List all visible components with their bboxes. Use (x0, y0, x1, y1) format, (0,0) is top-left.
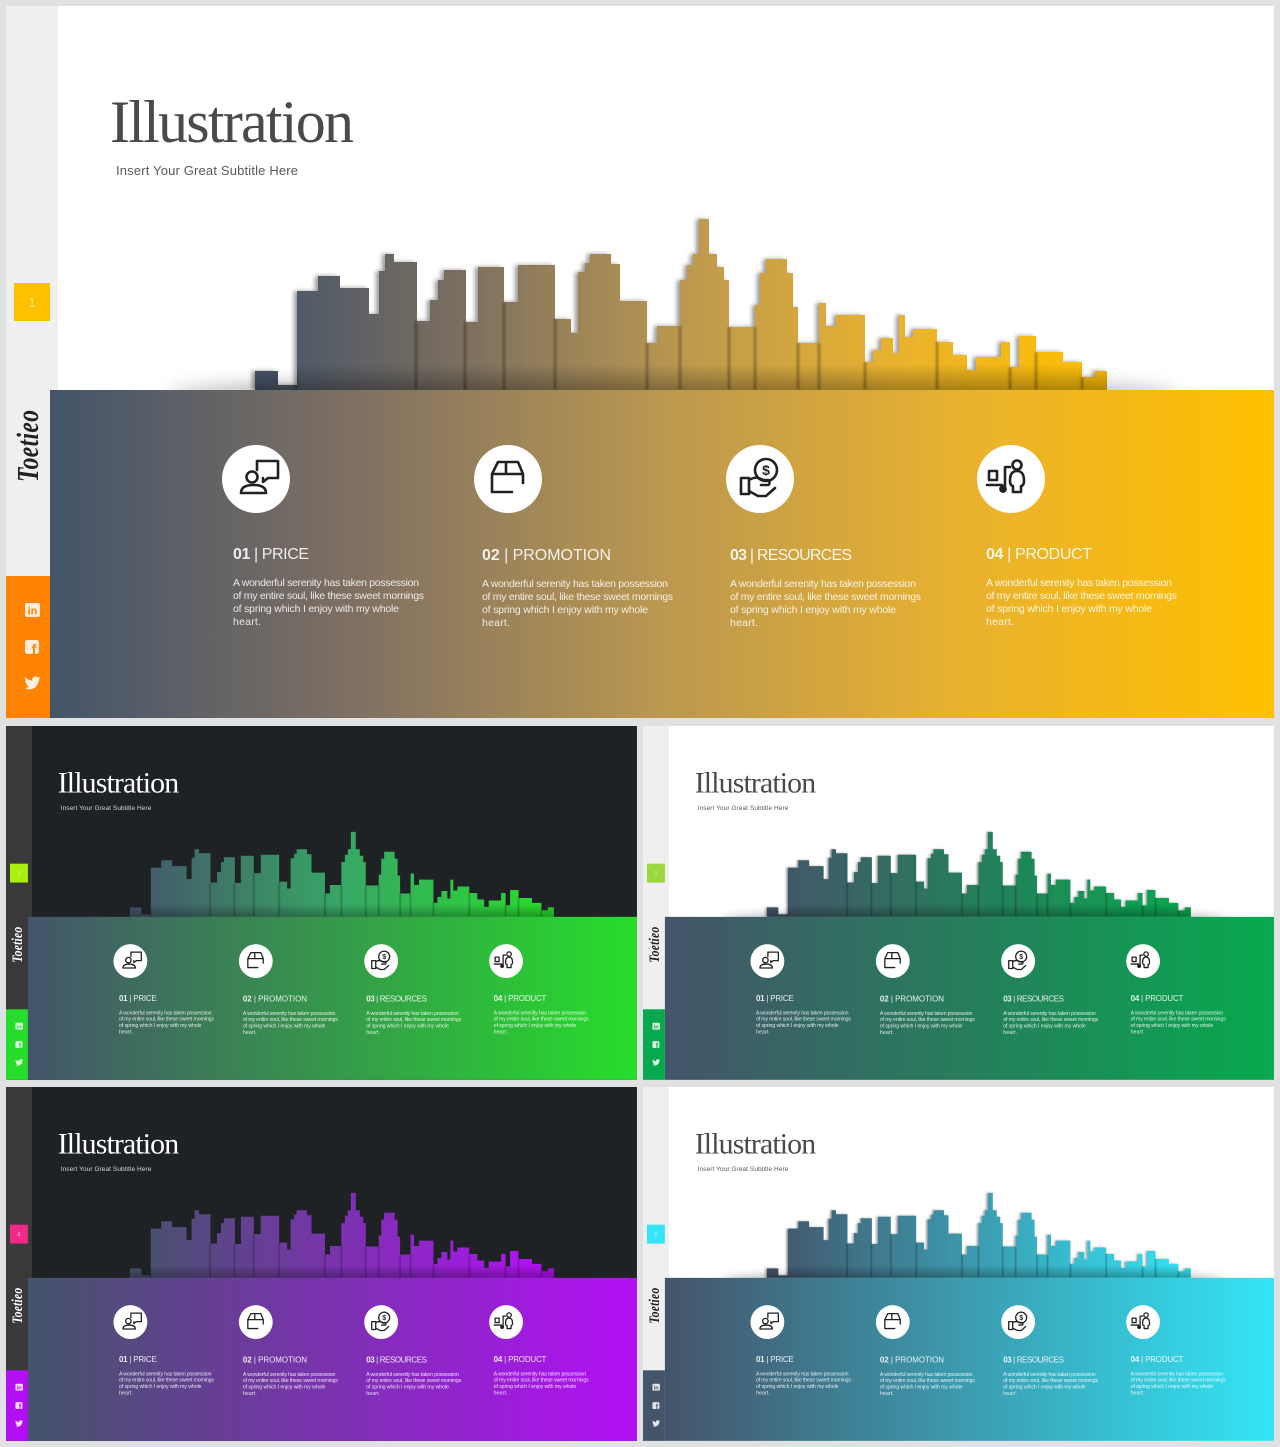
text block (1131, 1010, 1226, 1036)
text block: heart. (880, 1030, 894, 1036)
text block: heart. (233, 616, 261, 628)
heading: 03 | RESOURCES (730, 547, 852, 564)
column 01 price (113, 1305, 214, 1397)
text block (243, 1011, 338, 1036)
text block: of spring which I enjoy with my whole (243, 1024, 326, 1030)
social block (6, 576, 50, 718)
text block: of spring which I enjoy with my whole (730, 604, 896, 616)
text block: of my entire soul, like these sweet mornings (119, 1378, 214, 1384)
page number badge: 5 (654, 1232, 658, 1239)
text block: of spring which I enjoy with my whole (366, 1024, 449, 1030)
social block (643, 1370, 665, 1441)
heading: 04 | PRODUCT (494, 1355, 547, 1364)
text block (1003, 1372, 1099, 1397)
left sidebar (6, 6, 58, 718)
city skyline (723, 832, 1226, 926)
text block: of spring which I enjoy with my whole (756, 1023, 839, 1029)
text block: of spring which I enjoy with my whole (494, 1384, 576, 1390)
icon: price (222, 445, 290, 513)
column 04 product (977, 445, 1177, 628)
city skyline (127, 1193, 555, 1278)
social block (6, 1009, 28, 1080)
text block: of my entire soul, like these sweet mornings (366, 1017, 462, 1023)
brand name: Toetieo (645, 1288, 662, 1324)
text block: A wonderful serenity has taken possession (1003, 1011, 1096, 1017)
text block: heart. (366, 1030, 380, 1036)
icon: product (977, 445, 1045, 513)
text block: A wonderful serenity has taken possession (1131, 1010, 1223, 1016)
text block: of spring which I enjoy with my whole (233, 603, 399, 615)
heading: 04 | PRODUCT (1131, 994, 1184, 1003)
text block: A wonderful serenity has taken possession (482, 578, 668, 590)
subtitle: Insert Your Great Subtitle Here (61, 805, 152, 812)
panel: light slide cyan (643, 1087, 1274, 1441)
text block: heart. (494, 1391, 508, 1397)
city skyline (127, 832, 555, 917)
text block (119, 1010, 214, 1036)
subtitle: Insert Your Great Subtitle Here (116, 163, 298, 178)
left sidebar (6, 726, 32, 1080)
icon: linkedin: in (654, 1385, 659, 1391)
text block: heart. (756, 1030, 770, 1036)
text block (366, 1011, 462, 1036)
page number badge (647, 864, 665, 883)
text block: A wonderful serenity has taken possession (366, 1372, 459, 1378)
text block: of my entire soul, like these sweet mornings (1003, 1378, 1099, 1384)
icon: product (1126, 944, 1160, 978)
text block: of spring which I enjoy with my whole (482, 604, 648, 616)
icon: facebook: f (19, 1043, 22, 1050)
text block (243, 1372, 338, 1397)
text block: A wonderful serenity has taken possession (756, 1371, 849, 1377)
text block: A wonderful serenity has taken possession (880, 1372, 973, 1378)
icon: facebook: f (656, 1404, 659, 1411)
icon: promotion (876, 944, 910, 978)
text block (1131, 1371, 1226, 1397)
text block: A wonderful serenity has taken possession (756, 1010, 849, 1016)
text block: of spring which I enjoy with my whole (119, 1023, 202, 1029)
text block (756, 1371, 851, 1397)
column 04 product (489, 1305, 589, 1397)
icon: price (750, 944, 784, 978)
title: Illustration (695, 767, 816, 800)
gradient band (28, 1278, 637, 1441)
text block: heart. (482, 617, 510, 629)
icon: promotion (876, 1305, 910, 1339)
text block (494, 1010, 589, 1036)
text block: of spring which I enjoy with my whole (1131, 1023, 1213, 1029)
text block: of spring which I enjoy with my whole (1003, 1385, 1086, 1391)
text block: of spring which I enjoy with my whole (243, 1385, 326, 1391)
icon: twitter (652, 1420, 660, 1427)
icon: resources (1001, 944, 1035, 978)
icon: promotion (474, 445, 542, 513)
text block: heart. (880, 1391, 894, 1397)
text block: heart. (1003, 1391, 1017, 1397)
gradient band (665, 917, 1274, 1080)
text block: heart. (243, 1391, 257, 1397)
left sidebar (643, 726, 669, 1080)
subtitle: Insert Your Great Subtitle Here (698, 805, 789, 812)
text block: of my entire soul, like these sweet mornings (986, 590, 1177, 602)
text block: A wonderful serenity has taken possession (880, 1011, 973, 1017)
heading: 01 | PRICE (756, 1355, 794, 1364)
panel: dark slide green (6, 726, 637, 1080)
text block (986, 577, 1177, 628)
text block (880, 1372, 975, 1397)
text block: of my entire soul, like these sweet mornings (119, 1017, 214, 1023)
icon: linkedin (25, 603, 40, 618)
text block: of my entire soul, like these sweet mornings (366, 1378, 462, 1384)
column 04 product (1126, 944, 1226, 1036)
text block: of my entire soul, like these sweet mornings (482, 591, 673, 603)
title: Illustration (695, 1128, 816, 1161)
page number badge: 3 (654, 871, 658, 878)
text block: of spring which I enjoy with my whole (494, 1023, 576, 1029)
text block: heart. (119, 1030, 133, 1036)
text block: of my entire soul, like these sweet mornings (1131, 1017, 1226, 1023)
icon: twitter (15, 1059, 23, 1066)
text block: heart. (1131, 1391, 1145, 1397)
text block: A wonderful serenity has taken possession (233, 577, 419, 589)
heading: 01 | PRICE (119, 994, 157, 1003)
text block: heart. (366, 1391, 380, 1397)
icon: promotion (239, 944, 273, 978)
column 01 price (222, 445, 424, 628)
gradient band (665, 1278, 1274, 1441)
page number badge: 1 (28, 295, 36, 310)
column 04 product (489, 944, 589, 1036)
icon: facebook (25, 640, 39, 657)
subtitle: Insert Your Great Subtitle Here (61, 1166, 152, 1173)
text block: A wonderful serenity has taken possession (986, 577, 1172, 589)
column 03 resources (364, 944, 462, 1036)
heading: 02 | PROMOTION (243, 1355, 307, 1364)
column 03 resources (726, 445, 921, 629)
text block: of my entire soul, like these sweet mornings (756, 1017, 851, 1023)
text block: of spring which I enjoy with my whole (986, 603, 1152, 615)
column 02 promotion (876, 1305, 975, 1397)
text block (119, 1371, 214, 1397)
text block: heart. (243, 1030, 257, 1036)
page number badge (10, 1225, 28, 1244)
text block: heart. (119, 1391, 133, 1397)
text block: of my entire soul, like these sweet mornings (756, 1378, 851, 1384)
heading: 01 | PRICE (233, 546, 309, 563)
text block: A wonderful serenity has taken possession (243, 1011, 336, 1017)
icon: resources (726, 445, 794, 513)
text block: A wonderful serenity has taken possession (730, 578, 916, 590)
column 02 promotion (239, 1305, 338, 1397)
brand name: Toetieo (8, 927, 25, 963)
text block: A wonderful serenity has taken possession (1003, 1372, 1096, 1378)
text block (1003, 1011, 1099, 1036)
text block: A wonderful serenity has taken possession (119, 1371, 212, 1377)
social block (6, 1370, 28, 1441)
text block: of my entire soul, like these sweet mornings (1003, 1017, 1099, 1023)
text block: of my entire soul, like these sweet mornings (494, 1017, 589, 1023)
icon: linkedin: in (17, 1385, 22, 1391)
icon: resources (364, 944, 398, 978)
subtitle: Insert Your Great Subtitle Here (698, 1166, 789, 1173)
text block: of spring which I enjoy with my whole (756, 1384, 839, 1390)
heading: 02 | PROMOTION (880, 1355, 944, 1364)
text block: A wonderful serenity has taken possession (119, 1010, 212, 1016)
brand name: Toetieo (645, 927, 662, 963)
text block: of my entire soul, like these sweet mornings (880, 1378, 975, 1384)
icon: linkedin: in (654, 1024, 659, 1030)
text block: of my entire soul, like these sweet mornings (494, 1378, 589, 1384)
text block: of my entire soul, like these sweet mornings (233, 590, 424, 602)
column 02 promotion (876, 944, 975, 1036)
icon: facebook: f (32, 641, 37, 657)
heading: 02 | PROMOTION (482, 547, 611, 564)
gradient band (28, 917, 637, 1080)
gradient band (50, 390, 1274, 718)
text block: heart. (986, 616, 1014, 628)
title: Illustration (58, 767, 179, 800)
icon: resources (1001, 1305, 1035, 1339)
text block: A wonderful serenity has taken possession (494, 1371, 586, 1377)
column 03 resources (1001, 944, 1099, 1036)
icon: price (113, 944, 147, 978)
panel: main slide yellow (6, 6, 1274, 718)
text block (233, 577, 424, 628)
icon: twitter (15, 1420, 23, 1427)
text block: A wonderful serenity has taken possession (243, 1372, 336, 1378)
heading: 01 | PRICE (119, 1355, 157, 1364)
heading: 04 | PRODUCT (1131, 1355, 1184, 1364)
column 03 resources (1001, 1305, 1099, 1397)
heading: 04 | PRODUCT (986, 546, 1092, 563)
text block (756, 1010, 851, 1036)
text block: of spring which I enjoy with my whole (880, 1024, 963, 1030)
text block (494, 1371, 589, 1397)
icon: linkedin: in (17, 1024, 22, 1030)
social block (643, 1009, 665, 1080)
column 01 price (750, 944, 851, 1036)
text block: of my entire soul, like these sweet mornings (730, 591, 921, 603)
icon: product (1126, 1305, 1160, 1339)
heading: 02 | PROMOTION (880, 994, 944, 1003)
icon: facebook: f (19, 1404, 22, 1411)
title: Illustration (58, 1128, 179, 1161)
text block: heart. (494, 1030, 508, 1036)
page number badge: 2 (17, 871, 21, 878)
text block: A wonderful serenity has taken possession (494, 1010, 586, 1016)
title: Illustration (110, 89, 354, 155)
brand name: Toetieo (8, 1288, 25, 1324)
icon: facebook: f (656, 1043, 659, 1050)
icon: product (489, 944, 523, 978)
column 01 price (750, 1305, 851, 1397)
left sidebar (6, 1087, 32, 1441)
page number badge (14, 283, 50, 321)
icon: promotion (239, 1305, 273, 1339)
icon: linkedin: in (28, 606, 38, 618)
icon: twitter (24, 676, 40, 689)
column 02 promotion (239, 944, 338, 1036)
text block (880, 1011, 975, 1036)
text block (730, 578, 921, 629)
heading: 01 | PRICE (756, 994, 794, 1003)
page number badge (647, 1225, 665, 1244)
icon: price (750, 1305, 784, 1339)
city skyline (167, 219, 1177, 409)
brand name: Toetieo (11, 410, 45, 482)
text block: of spring which I enjoy with my whole (1131, 1384, 1213, 1390)
text block: of my entire soul, like these sweet mornings (880, 1017, 975, 1023)
text block: heart. (756, 1391, 770, 1397)
text block: of spring which I enjoy with my whole (880, 1385, 963, 1391)
city skyline (723, 1193, 1226, 1287)
text block: heart. (1131, 1030, 1145, 1036)
page number badge (10, 864, 28, 883)
text block: of my entire soul, like these sweet mornings (243, 1378, 338, 1384)
column 03 resources (364, 1305, 462, 1397)
column 02 promotion (474, 445, 673, 629)
page number badge: 4 (17, 1232, 21, 1239)
text block: A wonderful serenity has taken possession (366, 1011, 459, 1017)
left sidebar (643, 1087, 669, 1441)
text block: of spring which I enjoy with my whole (366, 1385, 449, 1391)
panel: light slide dark green (643, 726, 1274, 1080)
text block: of my entire soul, like these sweet mornings (243, 1017, 338, 1023)
column 01 price (113, 944, 214, 1036)
icon: resources (364, 1305, 398, 1339)
text block: of spring which I enjoy with my whole (1003, 1024, 1086, 1030)
text block: heart. (1003, 1030, 1017, 1036)
heading: 04 | PRODUCT (494, 994, 547, 1003)
panel: dark slide purple (6, 1087, 637, 1441)
heading: 02 | PROMOTION (243, 994, 307, 1003)
text block: heart. (730, 617, 758, 629)
text block: of spring which I enjoy with my whole (119, 1384, 202, 1390)
heading: 03 | RESOURCES (366, 1355, 427, 1364)
icon: price (113, 1305, 147, 1339)
text block (482, 578, 673, 629)
heading: 03 | RESOURCES (1003, 994, 1064, 1003)
column 04 product (1126, 1305, 1226, 1397)
text block (366, 1372, 462, 1397)
icon: twitter (652, 1059, 660, 1066)
heading: 03 | RESOURCES (366, 994, 427, 1003)
heading: 03 | RESOURCES (1003, 1355, 1064, 1364)
text block: of my entire soul, like these sweet mornings (1131, 1378, 1226, 1384)
text block: A wonderful serenity has taken possession (1131, 1371, 1223, 1377)
icon: product (489, 1305, 523, 1339)
